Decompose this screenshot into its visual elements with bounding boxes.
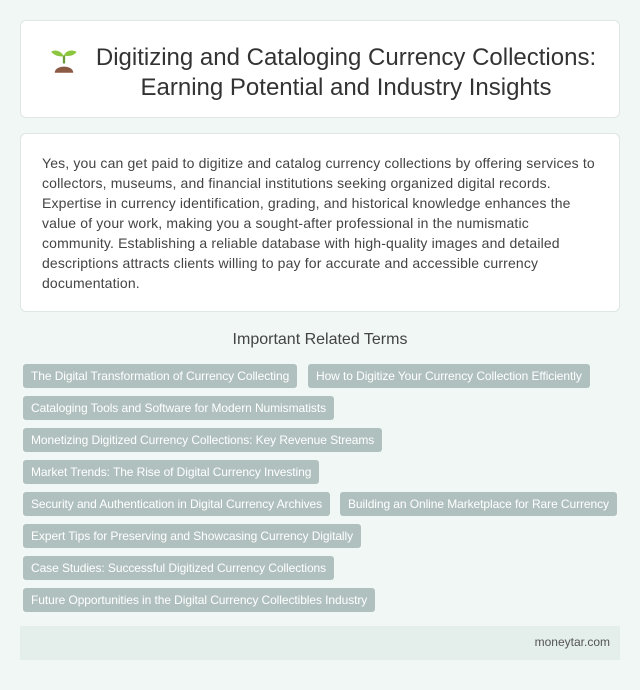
related terms tags: Security and Authentication in Digital Currency Archives (31, 497, 322, 511)
related terms tags: Market Trends: The Rise of Digital Currency Investing (31, 465, 311, 479)
related terms tags: The Digital Transformation of Currency Collecting (31, 369, 289, 383)
section heading: Important Related Terms (233, 331, 407, 348)
footer (20, 626, 620, 660)
related terms tags: Monetizing Digitized Currency Collections: Key Revenue Streams (31, 433, 374, 447)
related terms tags: Cataloging Tools and Software for Modern Numismatists (31, 401, 326, 415)
intro text panel: Yes, you can get paid to digitize and catalog currency collections by offering services to collectors, museums, and financial institutions seeking organized digital records. Expertise in currency identification, grading, and historical knowledge enhances the value of your work, making you a sought-after professional in the numismatic community. Establishing a reliable database with high-quality images and detailed descriptions attracts clients willing to pay for accurate and accessible currency documentation. (42, 155, 595, 291)
related terms tags: How to Digitize Your Currency Collection Efficiently (316, 369, 582, 383)
icon: sprout (51, 50, 77, 73)
related terms tags (23, 364, 617, 612)
related terms tags: Future Opportunities in the Digital Currency Collectibles Industry (31, 593, 367, 607)
related terms tags: Case Studies: Successful Digitized Currency Collections (31, 561, 326, 575)
related terms tags: Building an Online Marketplace for Rare Currency (348, 497, 609, 511)
title: Digitizing and Cataloging Currency Collections: Earning Potential and Industry Insights (96, 44, 596, 101)
related terms tags: Expert Tips for Preserving and Showcasing Currency Digitally (31, 529, 353, 543)
header panel (20, 20, 620, 118)
footer: moneytar.com (535, 635, 610, 649)
